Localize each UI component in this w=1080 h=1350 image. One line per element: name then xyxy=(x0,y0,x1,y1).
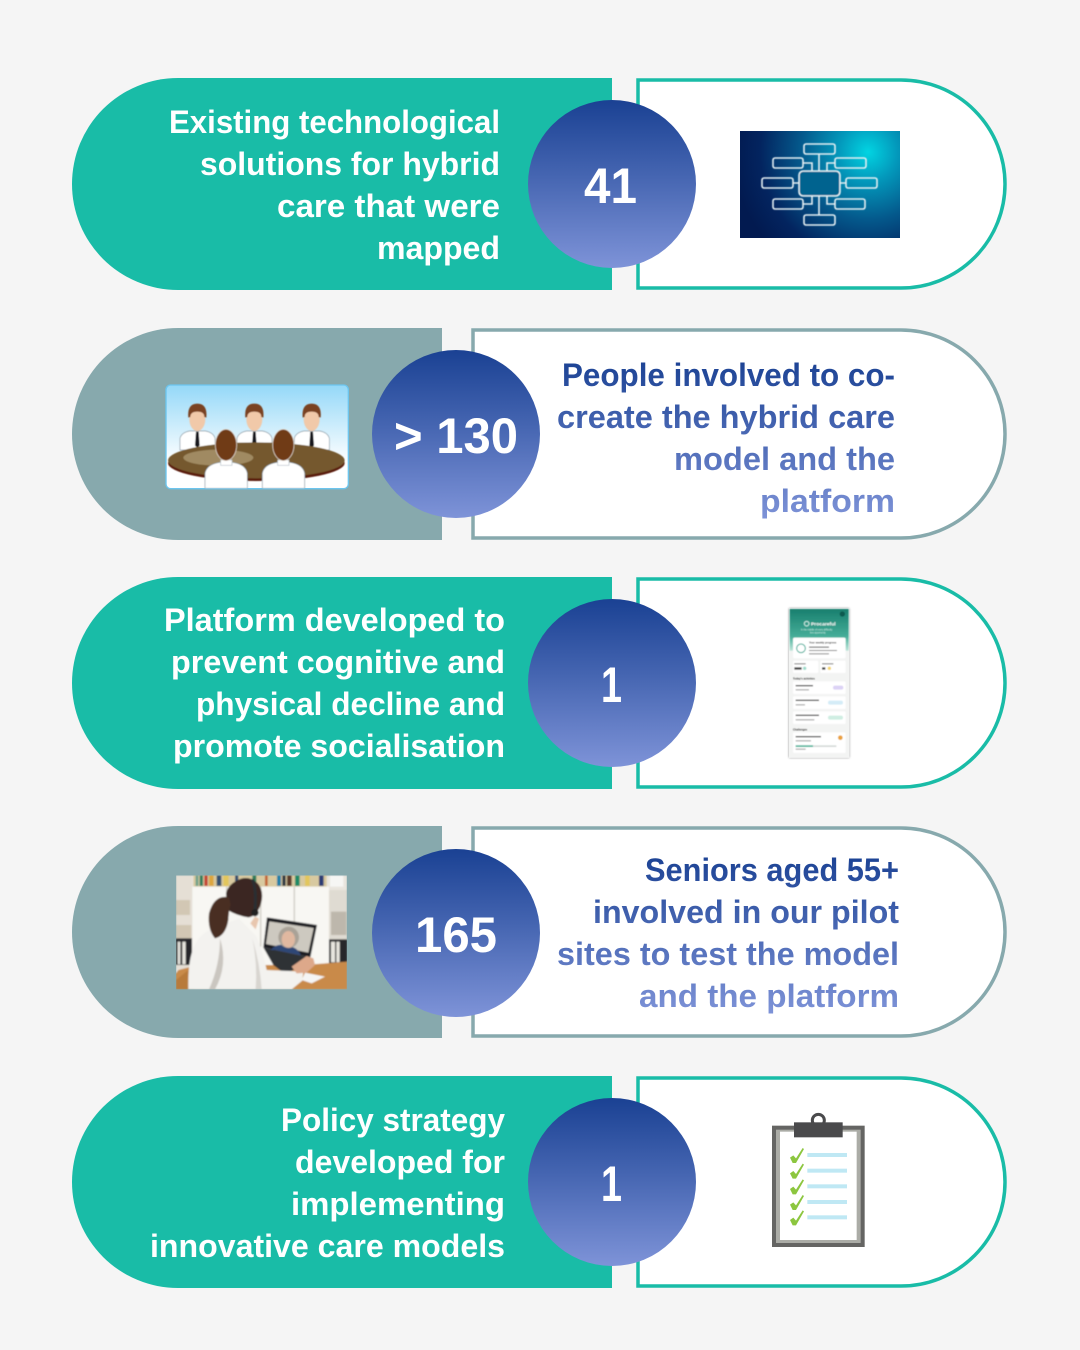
number badge: 1 xyxy=(528,599,696,767)
teal label pill xyxy=(72,78,612,290)
teal label pill xyxy=(72,1076,612,1288)
outlined image panel xyxy=(638,1078,1005,1286)
description text: solutions for hybrid xyxy=(200,146,500,182)
description text: care that were xyxy=(277,188,500,224)
description text: implementing xyxy=(291,1186,505,1222)
icon: clipboard checklist xyxy=(772,1114,865,1247)
description text xyxy=(169,104,500,266)
icon: mobile app screenshot: Challenges xyxy=(793,727,808,731)
description text: platform xyxy=(760,483,895,519)
number badge: > 130: > 130 xyxy=(394,408,518,464)
description text: Platform developed to xyxy=(164,602,505,638)
icon: mobile app screenshot: In the middle of every difficulty xyxy=(801,629,833,632)
number badge: 1 xyxy=(528,1098,696,1266)
description text: Seniors aged 55+ xyxy=(645,852,899,888)
outlined text panel xyxy=(473,330,1005,538)
icon: mobile app screenshot: Your weekly progress xyxy=(809,641,837,645)
number badge: > 130 xyxy=(372,350,540,518)
description text: create the hybrid care xyxy=(557,399,895,435)
outlined image panel xyxy=(638,579,1005,787)
panel: people involved xyxy=(72,328,1005,540)
description text: innovative care models xyxy=(150,1228,505,1264)
icon: meeting round a table xyxy=(166,385,348,489)
icon: mobile app screenshot: Procareful xyxy=(811,621,836,627)
panel: policy strategy xyxy=(72,1076,1005,1288)
description text: model and the xyxy=(674,441,895,477)
grey image pill xyxy=(72,328,442,540)
grey image pill xyxy=(72,826,442,1038)
description text: and the platform xyxy=(639,978,899,1014)
image: carer on a video call xyxy=(176,875,347,989)
description text: developed for xyxy=(295,1144,505,1180)
description text: promote socialisation xyxy=(173,728,505,764)
icon: mobile app screenshot: lies opportunity xyxy=(810,632,826,635)
icon: flow diagram image xyxy=(740,131,900,238)
number badge: 165 xyxy=(372,849,540,1017)
description text: involved in our pilot xyxy=(593,894,899,930)
description text xyxy=(150,1102,505,1264)
description text xyxy=(557,357,895,519)
outlined text panel xyxy=(473,828,1005,1036)
number badge: 41: 41 xyxy=(584,158,637,214)
description text: sites to test the model xyxy=(557,936,899,972)
teal label pill xyxy=(72,577,612,789)
description text xyxy=(164,602,505,764)
icon: mobile app screenshot: Today's activities xyxy=(793,677,815,681)
description text: physical decline and xyxy=(196,686,505,722)
description text: prevent cognitive and xyxy=(171,644,505,680)
panel: existing technological solutions xyxy=(72,78,1005,290)
number badge: 165: 165 xyxy=(415,907,497,963)
description text: Existing technological xyxy=(169,104,500,140)
number badge: 1: 1 xyxy=(601,1156,622,1212)
description text: People involved to co- xyxy=(562,357,895,393)
description text: Policy strategy xyxy=(281,1102,505,1138)
number badge: 1: 1 xyxy=(601,657,622,713)
panel: seniors involved xyxy=(72,826,1005,1038)
description text xyxy=(557,852,899,1014)
description text: mapped xyxy=(377,230,500,266)
outlined image panel xyxy=(638,80,1005,288)
icon: mobile app screenshot xyxy=(789,608,849,758)
number badge: 41 xyxy=(528,100,696,268)
panel: platform developed xyxy=(72,577,1005,789)
